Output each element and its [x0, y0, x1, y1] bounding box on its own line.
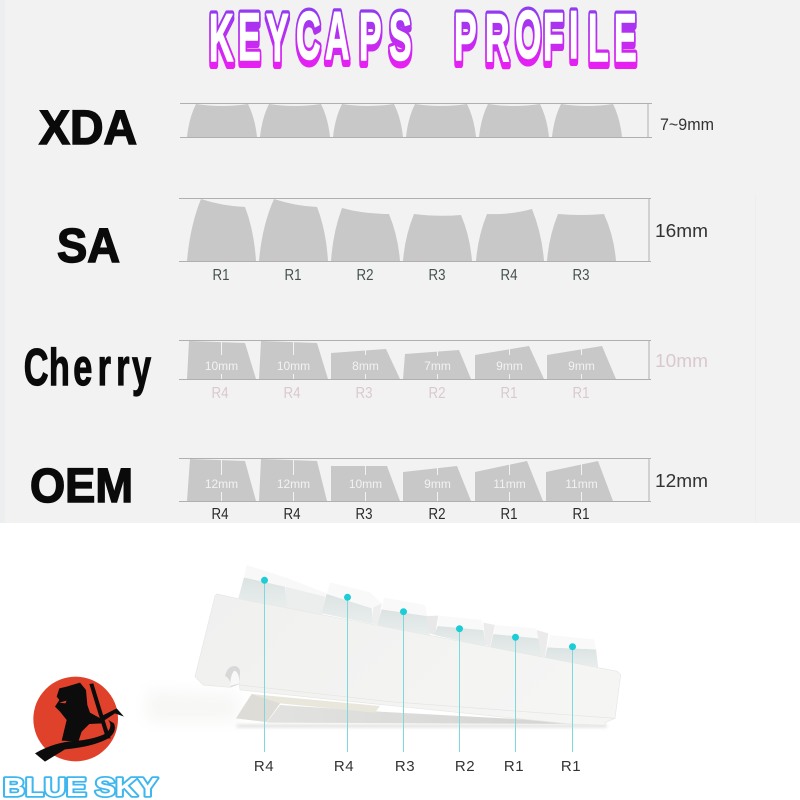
label: OEM height: 12mm: [655, 471, 708, 491]
label: XDA height: 7~9mm: [660, 115, 714, 134]
chart: OEM profile: 9mm: [424, 477, 451, 491]
chart: SA profile: R4: [500, 267, 518, 284]
chart: Cherry profile: R1: [572, 385, 590, 402]
chart: Cherry profile: 10mm: [277, 359, 310, 373]
row labels: R1: [561, 758, 581, 775]
chart: OEM profile: R1: [572, 506, 590, 523]
chart: OEM profile: 12mm: [205, 477, 238, 491]
chart: SA profile: R1: [284, 267, 302, 284]
row labels: [254, 758, 581, 775]
heading: SA: SA: [57, 220, 120, 273]
panel: profile comparison background: [0, 0, 800, 523]
row labels: R4: [334, 758, 354, 775]
chart: OEM profile: R4: [284, 506, 301, 523]
logo: ninja on red sun: [33, 677, 124, 762]
row labels: R1: [504, 758, 524, 775]
chart: OEM profile: [179, 458, 651, 523]
chart: SA profile: [179, 198, 651, 284]
heading: OEM: OEM: [30, 460, 133, 513]
heading: Cherry: Cherry: [24, 339, 151, 397]
label: Cherry height: 10mm: [655, 351, 708, 371]
illustration: keyboard side view: [147, 565, 621, 727]
title: KEYCAPSPROFILE: [209, 1, 637, 80]
panel: white lower section: [0, 523, 800, 800]
callout lines and dots: [261, 577, 576, 752]
chart: SA profile: R2: [356, 267, 374, 284]
chart: OEM profile: R2: [428, 506, 446, 523]
chart: Cherry profile: R4: [212, 385, 229, 402]
label: SA height: 16mm: [655, 221, 708, 241]
chart: OEM profile: R3: [356, 506, 373, 523]
chart: Cherry profile: R1: [500, 385, 518, 402]
chart: SA profile: R1: [212, 267, 230, 284]
chart: Cherry profile: [179, 340, 651, 402]
chart: SA profile: R3: [572, 267, 590, 284]
chart: OEM profile: 12mm: [277, 477, 310, 491]
chart: Cherry profile: 7mm: [424, 359, 451, 373]
chart: Cherry profile: 10mm: [205, 359, 238, 373]
chart: Cherry profile: R3: [356, 385, 373, 402]
row labels: R4: [254, 758, 274, 775]
row labels: R3: [395, 758, 415, 775]
chart: Cherry profile: 9mm: [568, 359, 595, 373]
chart: OEM profile: 11mm: [493, 477, 526, 491]
chart: OEM profile: 10mm: [349, 477, 382, 491]
chart: Cherry profile: 9mm: [496, 359, 523, 373]
heading: XDA: XDA: [39, 102, 137, 155]
chart: Cherry profile: 8mm: [352, 359, 379, 373]
chart: OEM profile: 11mm: [565, 477, 598, 491]
row labels: R2: [455, 758, 475, 775]
chart: SA profile: R3: [428, 267, 446, 284]
chart: XDA profile: [180, 104, 652, 138]
chart: Cherry profile: R2: [428, 385, 446, 402]
chart: OEM profile: R1: [500, 506, 518, 523]
chart: OEM profile: R4: [212, 506, 229, 523]
chart: Cherry profile: R4: [284, 385, 301, 402]
